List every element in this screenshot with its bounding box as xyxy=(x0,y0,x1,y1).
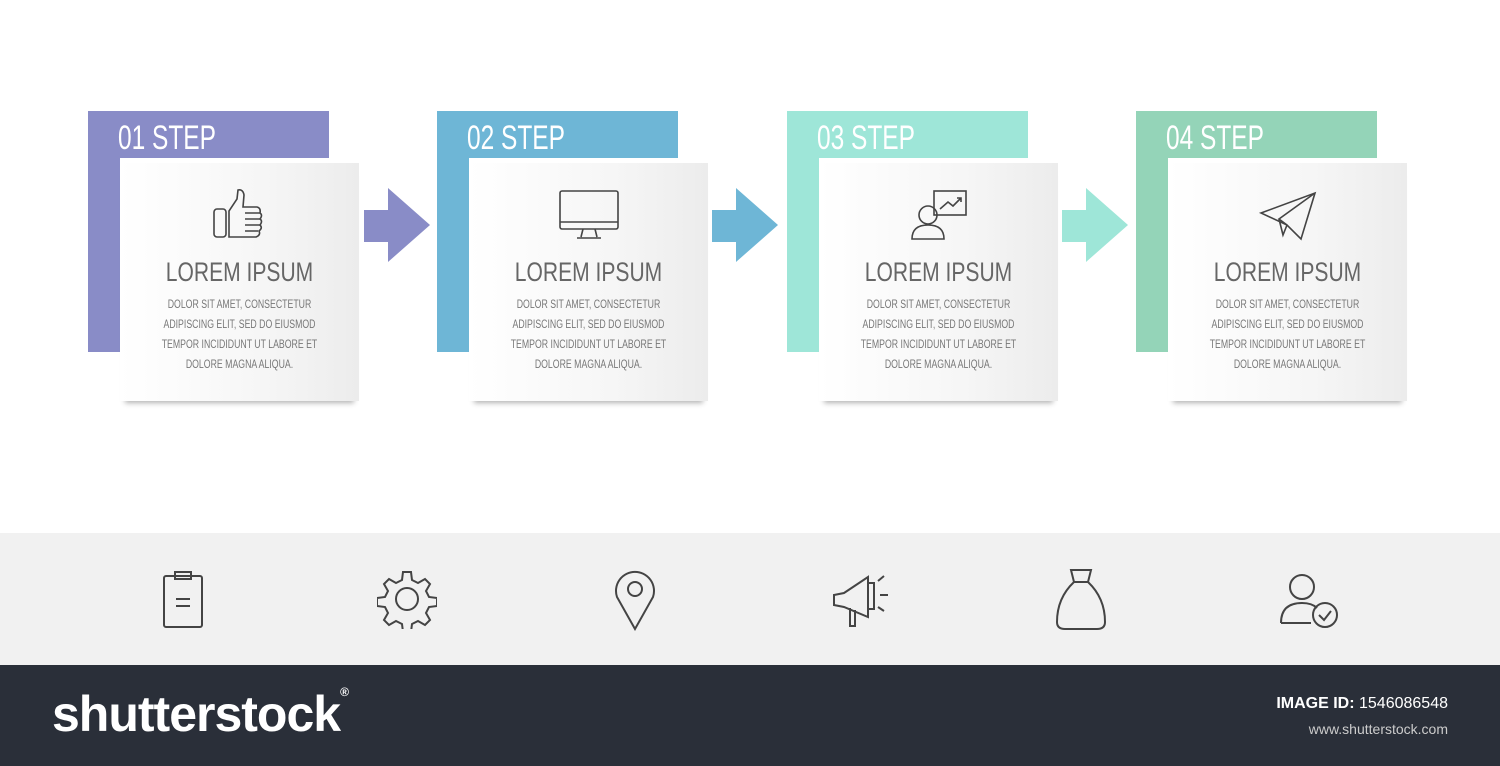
icon: user check xyxy=(1280,574,1338,628)
step 2 text: TEMPOR INCIDIDUNT UT LABORE ET xyxy=(511,339,666,351)
arrow 1 xyxy=(364,188,430,262)
website: www.shutterstock.com xyxy=(1309,721,1448,737)
image id: IMAGE ID: 1546086548 xyxy=(1276,695,1448,712)
step 2 text: DOLOR SIT AMET, CONSECTETUR xyxy=(517,299,660,311)
icon: monitor xyxy=(559,190,619,239)
icon: thumbs up xyxy=(213,189,262,238)
step 4 label: 04 STEP xyxy=(1166,119,1264,157)
icon: megaphone xyxy=(833,575,888,627)
step 4 text: DOLOR SIT AMET, CONSECTETUR xyxy=(1216,299,1359,311)
icon: paper plane xyxy=(1259,192,1316,240)
step 2 xyxy=(437,111,708,406)
step 2 card xyxy=(469,163,708,401)
arrow 3 xyxy=(1062,188,1128,262)
icon: bag xyxy=(1056,569,1106,630)
step 1 text: DOLOR SIT AMET, CONSECTETUR xyxy=(168,299,311,311)
arrow 2 xyxy=(712,188,778,262)
icon: clipboard xyxy=(163,571,203,628)
step 4 text: DOLORE MAGNA ALIQUA. xyxy=(1234,359,1341,371)
step 4 text xyxy=(1210,299,1366,371)
step 1 text: DOLORE MAGNA ALIQUA. xyxy=(186,359,293,371)
icon: presenter xyxy=(911,190,967,240)
step 1 text: TEMPOR INCIDIDUNT UT LABORE ET xyxy=(162,339,317,351)
step 2 text: ADIPISCING ELIT, SED DO EIUSMOD xyxy=(512,319,664,331)
step 4 card xyxy=(1168,163,1407,401)
step 3 title: LOREM IPSUM xyxy=(865,257,1012,287)
step 3 text: ADIPISCING ELIT, SED DO EIUSMOD xyxy=(862,319,1014,331)
footer xyxy=(0,665,1500,766)
step 4 title: LOREM IPSUM xyxy=(1214,257,1361,287)
step 4 xyxy=(1136,111,1407,406)
step 2 title: LOREM IPSUM xyxy=(515,257,662,287)
icon: location pin xyxy=(615,570,655,631)
step 3 text: DOLORE MAGNA ALIQUA. xyxy=(885,359,992,371)
step 3 label: 03 STEP xyxy=(817,119,915,157)
step 1 text: ADIPISCING ELIT, SED DO EIUSMOD xyxy=(163,319,316,331)
icon: gear xyxy=(377,571,437,629)
step 3 text: TEMPOR INCIDIDUNT UT LABORE ET xyxy=(861,339,1016,351)
icon band xyxy=(0,533,1500,665)
step 2 label: 02 STEP xyxy=(467,119,565,157)
step 2 text: DOLORE MAGNA ALIQUA. xyxy=(535,359,642,371)
step 1 title: LOREM IPSUM xyxy=(166,257,313,287)
step 2 text xyxy=(510,299,666,371)
step 4 text: ADIPISCING ELIT, SED DO EIUSMOD xyxy=(1211,319,1364,331)
step 1 xyxy=(88,111,359,406)
step 1 card xyxy=(120,163,359,401)
step 1 text xyxy=(162,299,317,371)
step 3 xyxy=(787,111,1058,406)
step 1 label: 01 STEP xyxy=(118,119,216,157)
step 4 text: TEMPOR INCIDIDUNT UT LABORE ET xyxy=(1210,339,1365,351)
logo: shutterstock® xyxy=(52,685,348,742)
step 3 card xyxy=(819,163,1058,401)
step 3 text: DOLOR SIT AMET, CONSECTETUR xyxy=(867,299,1010,311)
step 3 text xyxy=(860,299,1016,371)
